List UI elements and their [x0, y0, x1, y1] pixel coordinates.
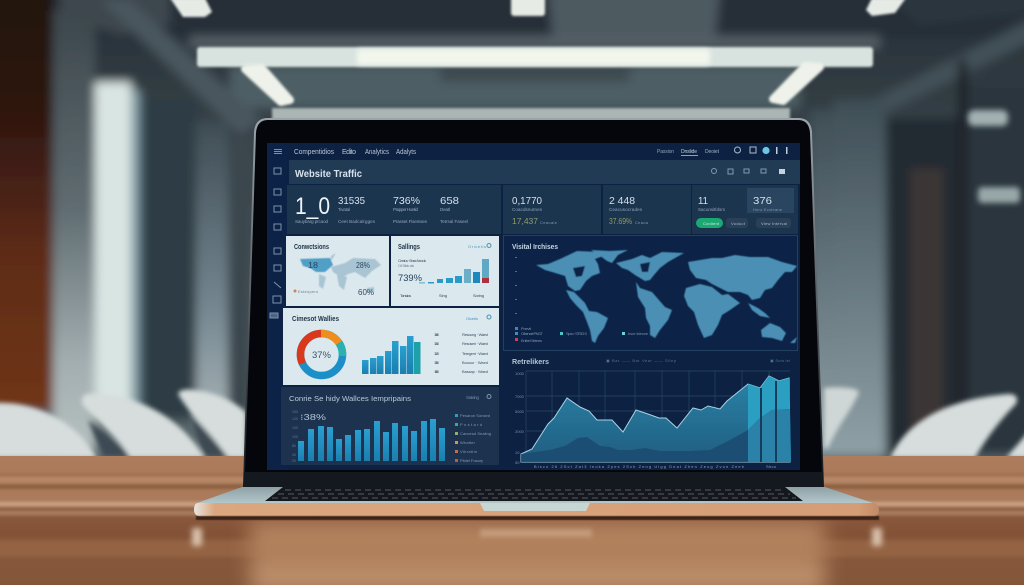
map legend [515, 326, 649, 343]
panel: area chart: Shco [766, 464, 777, 469]
donut chart: 37% [312, 350, 331, 360]
stats panel: traffic totals: 658 [440, 195, 459, 207]
panel: weekly bars: 100 [292, 435, 298, 439]
panel: area chart: Retrelikers [512, 359, 549, 366]
legend [455, 413, 491, 463]
wooden table [0, 456, 1024, 585]
panel: connections map: Esteopers [298, 289, 318, 294]
panel: weekly bars: 80 [292, 444, 296, 448]
laptop base [194, 487, 879, 520]
panel: weekly bars: Sateing [466, 395, 479, 400]
panel: sales bars: Ot Slick ols [398, 263, 414, 268]
stats panel: traffic totals: Prasset Fisemses [393, 219, 428, 224]
panel: area chart: 10 [515, 450, 520, 455]
panel: weekly bars: 150 [292, 410, 298, 414]
panel: sales bars: Sing [439, 293, 447, 298]
ceiling lights [170, 0, 1020, 203]
panel: connections map: Conwctsions [294, 244, 329, 251]
stats panel: actions: 11 [698, 195, 708, 207]
stats panel: traffic totals: Sauybarg prcaod [295, 219, 328, 224]
panel: connections map [286, 236, 389, 306]
stats panel: traffic totals: Prapper Hoetid [393, 207, 418, 212]
panel: sales bars: Centus · Boss Noods [398, 258, 426, 263]
panel: world map [503, 235, 798, 351]
title bar: Website Traffic [295, 168, 362, 180]
legend: Bousur · Waed [462, 360, 488, 365]
top navigation: Deoiet [705, 149, 720, 155]
bar chart [298, 419, 445, 461]
stats panel: sessions: Ceacusocrades [609, 207, 643, 212]
stats panel: sessions: 2 448 [609, 195, 635, 207]
panel: area chart: 1000 [515, 371, 525, 376]
top navigation: Analytics [365, 149, 389, 156]
title bar [289, 160, 800, 184]
stats panel: conversions: 0,1770 [512, 195, 542, 207]
button: green: Conlient [703, 221, 720, 226]
stats panel: traffic totals: Ceet Badcalrgges [338, 219, 376, 224]
panel: area chart: ▣ Bar —— Bar Vear —— Silep [606, 358, 677, 363]
panel: area chart: 5000 [515, 409, 525, 414]
stats panel: traffic totals: Tivatal [338, 207, 350, 212]
laptop [194, 118, 879, 520]
legend: 1 050 [434, 360, 440, 365]
panel: weekly bars: Conrie Se hidy Wallces Iempripains [289, 394, 411, 403]
map legend: Pnevit [521, 326, 532, 331]
stats panel: conversions: 17,437 [512, 217, 539, 226]
legend: Bassap · Waed [462, 369, 488, 374]
keyboard [265, 487, 803, 501]
stats panel: actions: Sacunsitldsrs [698, 207, 726, 212]
chairs [0, 387, 1024, 458]
stats panel: traffic totals [287, 185, 501, 234]
map legend: Spoo · STSG S [566, 331, 587, 336]
right wall [810, 110, 834, 455]
map legend: Ince ideove [628, 331, 649, 336]
panel: connections map: 60% [358, 287, 374, 297]
stats panel: sessions [603, 185, 691, 234]
panel: connections map: 18 [308, 260, 318, 270]
map: light [300, 253, 381, 292]
stats panel: conversions: Coacdsnutnes [512, 207, 543, 212]
legend: 1 000 [434, 332, 440, 337]
highlighted band [748, 376, 791, 462]
panel: area chart: 7000 [515, 394, 525, 399]
panel: weekly bars: ⁝38% [300, 413, 326, 422]
laptop hinge strip [244, 472, 823, 488]
panel: sales bars [391, 236, 499, 306]
panel: weekly bars: 120 [292, 417, 298, 421]
top navigation [294, 147, 788, 156]
panel: sales bars: 739% [398, 273, 422, 283]
stats panel: sessions: 37.69% [609, 217, 632, 226]
panel: area chart: 50 [515, 460, 520, 465]
top navigation: Edito [342, 149, 356, 156]
legend: 1 150 [434, 341, 440, 346]
legend: Cancesd Sealing [460, 431, 491, 436]
stats panel: actions: Hero Evoleane [753, 207, 783, 212]
panel: sales bars: Oricetis [468, 244, 486, 249]
panel: weekly bars: 40 [292, 453, 296, 457]
panel: weekly bars: 20 [292, 459, 296, 463]
legend: Vibratim [460, 449, 478, 454]
panel: donut and bars [283, 308, 499, 385]
panel: sales bars: Sallings [398, 244, 420, 251]
bar chart [362, 336, 420, 374]
top navigation: Passion [657, 149, 674, 155]
stats panel: traffic totals: Deatl [440, 207, 450, 212]
map legend: Olhenoel PNGT [521, 331, 544, 336]
world map shapes [536, 250, 797, 343]
top navigation: Dnslide [681, 149, 697, 155]
legend: 1 800 [434, 369, 440, 374]
sidebar [267, 143, 287, 470]
stats panel: traffic totals: 31535 [338, 195, 365, 207]
stats panel: sessions: Ceaoa [635, 220, 649, 225]
stats panel: conversions: Ceaoale [540, 220, 558, 225]
panel: area chart: Bisco 26 2Sct Zat3 Ieoka Zpes 2Sch Zeng Ulgg Deat Zhen Zeug Zvon Zeeb [534, 464, 745, 469]
legend: Teregent · Waed [462, 351, 488, 356]
legend: Postard [460, 422, 482, 427]
panel: world map: Visital Irchises [512, 244, 558, 251]
panel: donut and bars: Cimesot Wallies [292, 316, 339, 323]
legend: Resoung · Waed [462, 332, 488, 337]
ceiling [0, 0, 1024, 38]
legend: 1 125 [434, 351, 440, 356]
left wall [53, 10, 95, 450]
button: export: Voduct [731, 221, 746, 226]
legend [434, 332, 488, 374]
button: view: View Interval [761, 221, 787, 226]
stats panel: conversions [503, 185, 601, 234]
laptop lid [243, 118, 824, 487]
panel: donut and bars: Oicetis [466, 316, 478, 321]
map legend: Enibel Setnes [521, 338, 542, 343]
donut chart [300, 333, 343, 376]
stats panel: actions [692, 185, 798, 234]
top navigation: Adalyts [396, 149, 416, 156]
panel: weekly bars [281, 387, 499, 465]
panel: area chart [503, 352, 798, 470]
band dividers [761, 381, 776, 462]
panel: sales bars: Tonsios [400, 293, 411, 298]
legend: Pesaron Sonsed [460, 413, 490, 418]
dashboard screen [267, 143, 800, 470]
stats panel: traffic totals: 736% [393, 195, 420, 207]
panel: sales bars: Soring [473, 293, 484, 298]
top navigation: Compentidios [294, 149, 334, 156]
panel: weekly bars: 100 [292, 426, 298, 430]
main area [521, 376, 790, 462]
stats panel: traffic totals: 1_0 [295, 193, 330, 220]
legend: Pitdel Fosary [460, 458, 483, 463]
legend: Resoseri · Waed [462, 341, 488, 346]
panel: area chart: ▣ Scrs iel [770, 358, 790, 363]
legend: Whatter [460, 440, 476, 445]
stats panel: traffic totals: Tetrsal Faseel [440, 219, 468, 224]
laptop reflection [250, 522, 825, 585]
panel: area chart: 2000 [515, 429, 525, 434]
secondary area [521, 409, 791, 462]
stats panel: actions: 376 [753, 195, 772, 207]
panel: connections map: 28% [356, 260, 370, 270]
